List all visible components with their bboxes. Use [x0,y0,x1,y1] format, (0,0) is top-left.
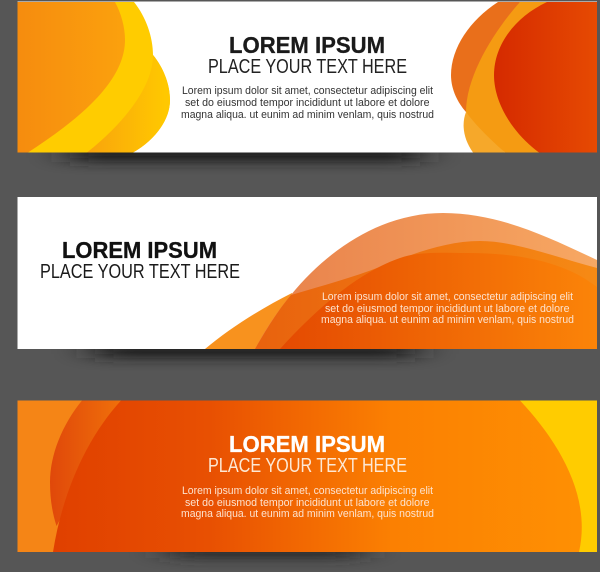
banner background [18,2,597,152]
shadows under banners [70,144,420,558]
body text: magna aliqua. ut eunim ad minim venlam, quis nostrud [321,314,574,326]
heading: LOREM IPSUM [62,237,217,263]
panel: middle banner [18,197,597,349]
body text: set do eiusmod tempor incididunt ut labore et dolore [185,97,430,109]
body text: set do eiusmod tempor incididunt ut labore et dolore [325,303,570,315]
banner background [18,197,597,349]
body text: Lorem ipsum dolor sit amet, consectetur adipiscing elit [182,85,433,97]
body text: magna aliqua. ut eunim ad minim venlam, quis nostrud [181,508,434,520]
banner background [18,400,597,552]
heading: LOREM IPSUM [229,431,385,457]
body text: Lorem ipsum dolor sit amet, consectetur adipiscing elit [322,291,573,303]
subheading: PLACE YOUR TEXT HERE [208,55,407,78]
body text: magna aliqua. ut eunim ad minim venlam, quis nostrud [181,109,434,121]
body text [181,485,434,520]
subheading: PLACE YOUR TEXT HERE [208,454,407,477]
body text [181,85,434,121]
body text [321,291,574,326]
red-orange wave [50,400,582,552]
right yellow corner [515,400,597,552]
panel: top banner [18,2,597,152]
left yellow wave [18,2,170,152]
panel: bottom banner [18,400,597,552]
orange wave [205,213,597,349]
body text: set do eiusmod tempor incididunt ut labore et dolore [185,497,430,509]
right red wave [451,2,597,152]
body text: Lorem ipsum dolor sit amet, consectetur adipiscing elit [182,485,433,497]
subheading: PLACE YOUR TEXT HERE [40,260,240,283]
heading: LOREM IPSUM [229,32,385,58]
